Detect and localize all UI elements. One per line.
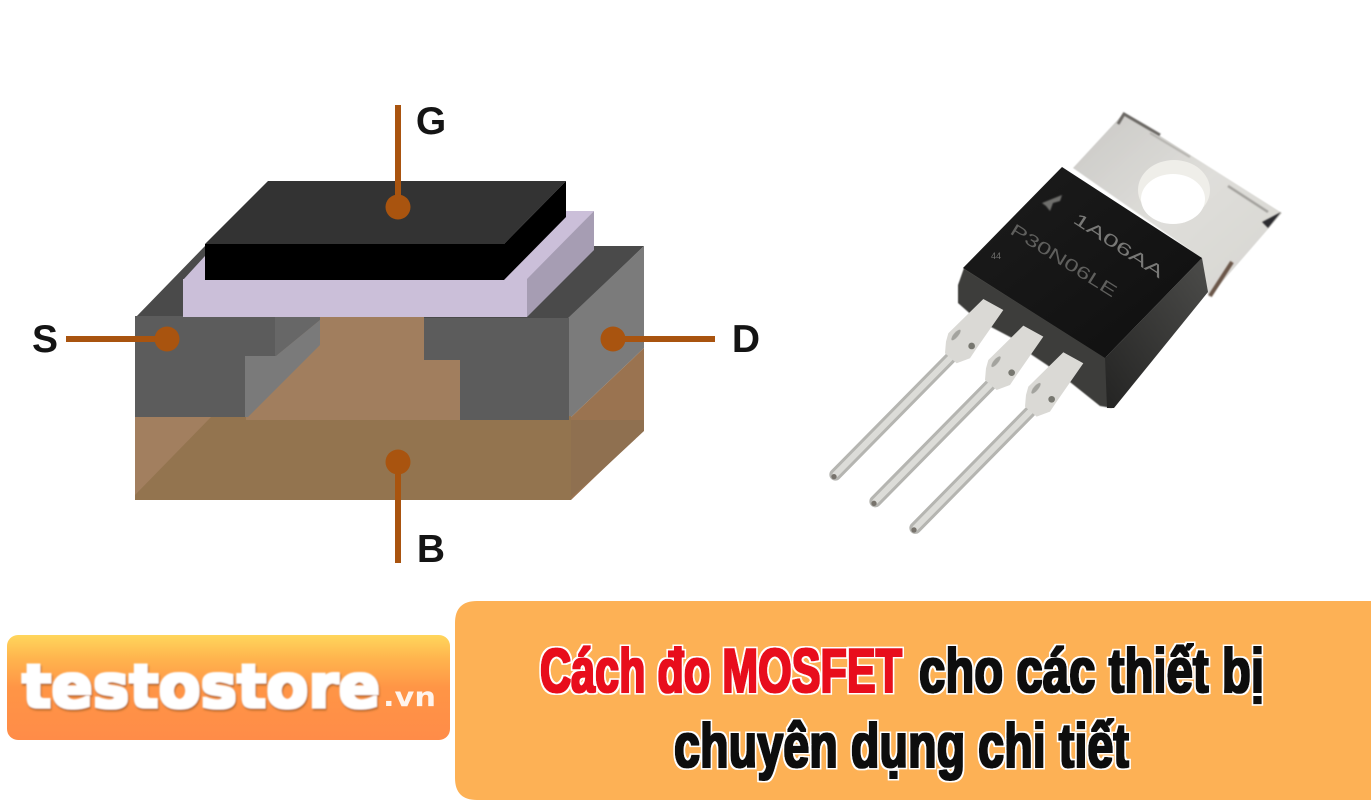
title line 1: Cách đo MOSFET xyxy=(540,637,902,706)
pin 1 xyxy=(831,299,1003,479)
MOSFET structure diagram xyxy=(32,100,760,571)
plastic body side xyxy=(1105,258,1208,408)
terminal B xyxy=(386,450,445,571)
title line 1: cho các thiết bị xyxy=(919,637,1264,706)
plastic body top face xyxy=(963,167,1202,358)
pin 2 xyxy=(871,326,1043,506)
chip marking 44: 44 xyxy=(991,251,1001,261)
title panel xyxy=(455,601,1371,800)
pin 3 xyxy=(911,352,1083,533)
terminal D: D xyxy=(732,318,760,361)
terminal G: G xyxy=(416,100,446,143)
source region xyxy=(135,316,276,417)
substrate side face xyxy=(568,348,644,500)
oxide layer xyxy=(183,211,594,317)
drain side face xyxy=(568,246,644,420)
gate metal xyxy=(205,181,566,280)
logo: testostore.vn: .vn xyxy=(383,682,436,713)
terminal D xyxy=(600,318,760,361)
chip logo mark xyxy=(1042,195,1062,211)
channel region xyxy=(245,316,460,420)
terminal G xyxy=(386,100,446,220)
terminal B: B xyxy=(417,528,445,571)
logo: testostore.vn xyxy=(7,635,450,740)
title line 2: chuyên dụng chi tiết xyxy=(674,712,1129,781)
chip marking 1A06AA: 1A06AA xyxy=(1070,209,1168,283)
MOSFET transistor component xyxy=(831,113,1282,533)
chip marking P30N06LE: P30N06LE xyxy=(1007,220,1120,301)
source/drain layer top surface xyxy=(135,246,644,319)
metal tab with mounting hole xyxy=(1073,113,1282,297)
substrate front face xyxy=(135,416,571,500)
terminal S xyxy=(32,318,180,361)
terminal S: S xyxy=(32,318,58,361)
plastic body front xyxy=(958,268,1112,408)
logo: testostore.vn: testostore xyxy=(22,652,380,722)
drain region xyxy=(424,318,569,420)
